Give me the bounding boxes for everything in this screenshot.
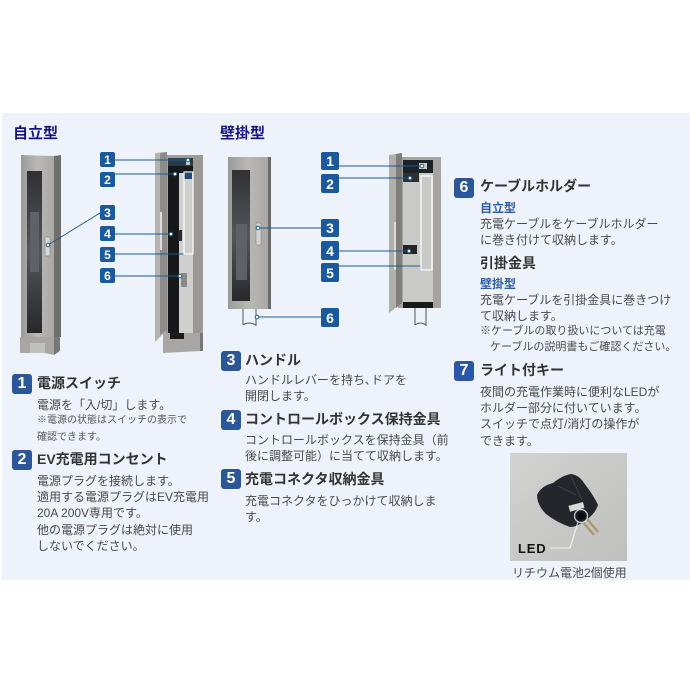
text: connector bracket: 充電コネクタをひっかけて収納しま: [245, 494, 437, 508]
heading: freestanding: 自立型: [13, 125, 58, 142]
cabinet: freestanding closed: [20, 155, 61, 355]
note: power switch: [37, 414, 187, 443]
note: power switch: ※電源の状態はスイッチの表示で: [37, 415, 187, 426]
text: light key: ホルダー部分に付いています。: [480, 401, 646, 415]
text: control box bracket: 後に調整可能）に当てて収納します。: [245, 449, 448, 463]
background panel: [2, 113, 690, 580]
badge 3: [221, 351, 241, 371]
text: handle: 開閉します。: [245, 389, 316, 403]
cabinet: wall-mounted open: [389, 153, 441, 326]
title: light key: ライト付キー: [480, 362, 564, 378]
text: hook fitting: [480, 293, 671, 323]
number badges: freestanding: 3: [104, 206, 111, 220]
badge 4: [221, 410, 241, 430]
number badges: wall-mounted: 4: [326, 243, 334, 259]
text: EV outlet: 他の電源プラグは絶対に使用: [37, 523, 193, 537]
cabinet: wall-mounted closed: [228, 157, 271, 326]
note: cable handling: ※ケーブルの取り扱いについては充電: [480, 325, 666, 337]
photo: light key with LED: [510, 453, 627, 561]
badge 5: 5: [227, 470, 235, 487]
caption: battery: リチウム電池2個使用: [512, 566, 627, 580]
cabinet: freestanding open: [155, 152, 203, 353]
text: EV outlet: [37, 474, 209, 553]
text: control box bracket: [245, 433, 449, 463]
title: cable holder: ケーブルホルダー: [480, 178, 591, 194]
badge 7: [454, 361, 474, 381]
text: connector bracket: [245, 494, 437, 524]
title: connector bracket: 充電コネクタ収納金具: [245, 471, 384, 487]
text: light key: [480, 385, 659, 448]
badge 2: 2: [18, 451, 26, 468]
title: hook fitting: 引掛金具: [480, 255, 536, 271]
label: freestanding type: 自立型: [480, 201, 516, 215]
text: hook fitting: 充電ケーブルを引掛金具に巻きつけ: [480, 293, 671, 307]
badge 6: [454, 178, 474, 198]
number badges: freestanding: 5: [104, 248, 111, 262]
note: power switch: 確認できます。: [37, 432, 106, 443]
text: EV outlet: 20A 200V専用です。: [37, 506, 148, 520]
badge 2: [12, 450, 32, 470]
number badges: freestanding: 6: [104, 269, 111, 283]
title: EV outlet: EV充電用コンセント: [37, 451, 168, 467]
text: cable holder: 充電ケーブルをケーブルホルダー: [480, 217, 659, 231]
label: wall type: 壁掛型: [480, 277, 516, 291]
text: cable holder: [480, 217, 659, 247]
number badges: wall-mounted: 5: [326, 265, 334, 281]
text: control box bracket: コントロールボックスを保持金具（前: [245, 433, 449, 447]
callout lines: freestanding: [46, 158, 193, 278]
number badges: freestanding: 4: [104, 227, 111, 241]
badge 4: 4: [227, 411, 235, 428]
number badges: wall-mounted: 6: [326, 310, 334, 326]
badge 5: [221, 469, 241, 489]
title: control box bracket: コントロールボックス保持金具: [245, 411, 441, 427]
text: connector bracket: す。: [245, 510, 268, 524]
title: handle: ハンドル: [245, 352, 301, 368]
text: hook fitting: て収納します。: [480, 309, 563, 323]
text: EV outlet: 適用する電源プラグはEV充電用: [37, 490, 209, 504]
callout lines: wall-mounted: [255, 164, 432, 319]
number badges: freestanding: [100, 152, 115, 283]
number badges: wall-mounted: 3: [326, 220, 334, 236]
text: EV outlet: しないでください。: [37, 539, 145, 553]
note: cable handling: ケーブルの説明書もご確認ください。: [490, 341, 676, 353]
heading: wall-mounted: 壁掛型: [220, 125, 265, 142]
badge 6: 6: [460, 179, 468, 196]
badge 1: 1: [18, 375, 26, 392]
number badges: wall-mounted: 2: [326, 176, 334, 192]
note: cable handling: [480, 324, 676, 353]
number badges: freestanding: 2: [104, 173, 111, 187]
text: handle: [245, 373, 407, 403]
photo: light key with LED: LED: [518, 541, 546, 556]
badge 7: 7: [460, 362, 468, 379]
text: handle: ハンドルレバーを持ち､ドアを: [245, 373, 407, 387]
text: power switch: 電源を「入/切」します。: [37, 398, 171, 412]
text: cable holder: に巻き付けて収納します。: [480, 233, 623, 247]
number badges: freestanding: 1: [104, 153, 111, 167]
badge 3: 3: [227, 352, 235, 369]
title: power switch: 電源スイッチ: [37, 375, 121, 391]
text: light key: 夜間の充電作業時に便利なLEDが: [480, 385, 659, 399]
number badges: wall-mounted: 1: [326, 153, 334, 169]
text: light key: できます。: [480, 434, 539, 448]
text: EV outlet: 電源プラグを接続します。: [37, 474, 180, 488]
badge 1: [12, 374, 32, 394]
number badges: wall-mounted: [321, 152, 339, 327]
text: light key: スイッチで点灯/消灯の操作が: [480, 417, 639, 431]
